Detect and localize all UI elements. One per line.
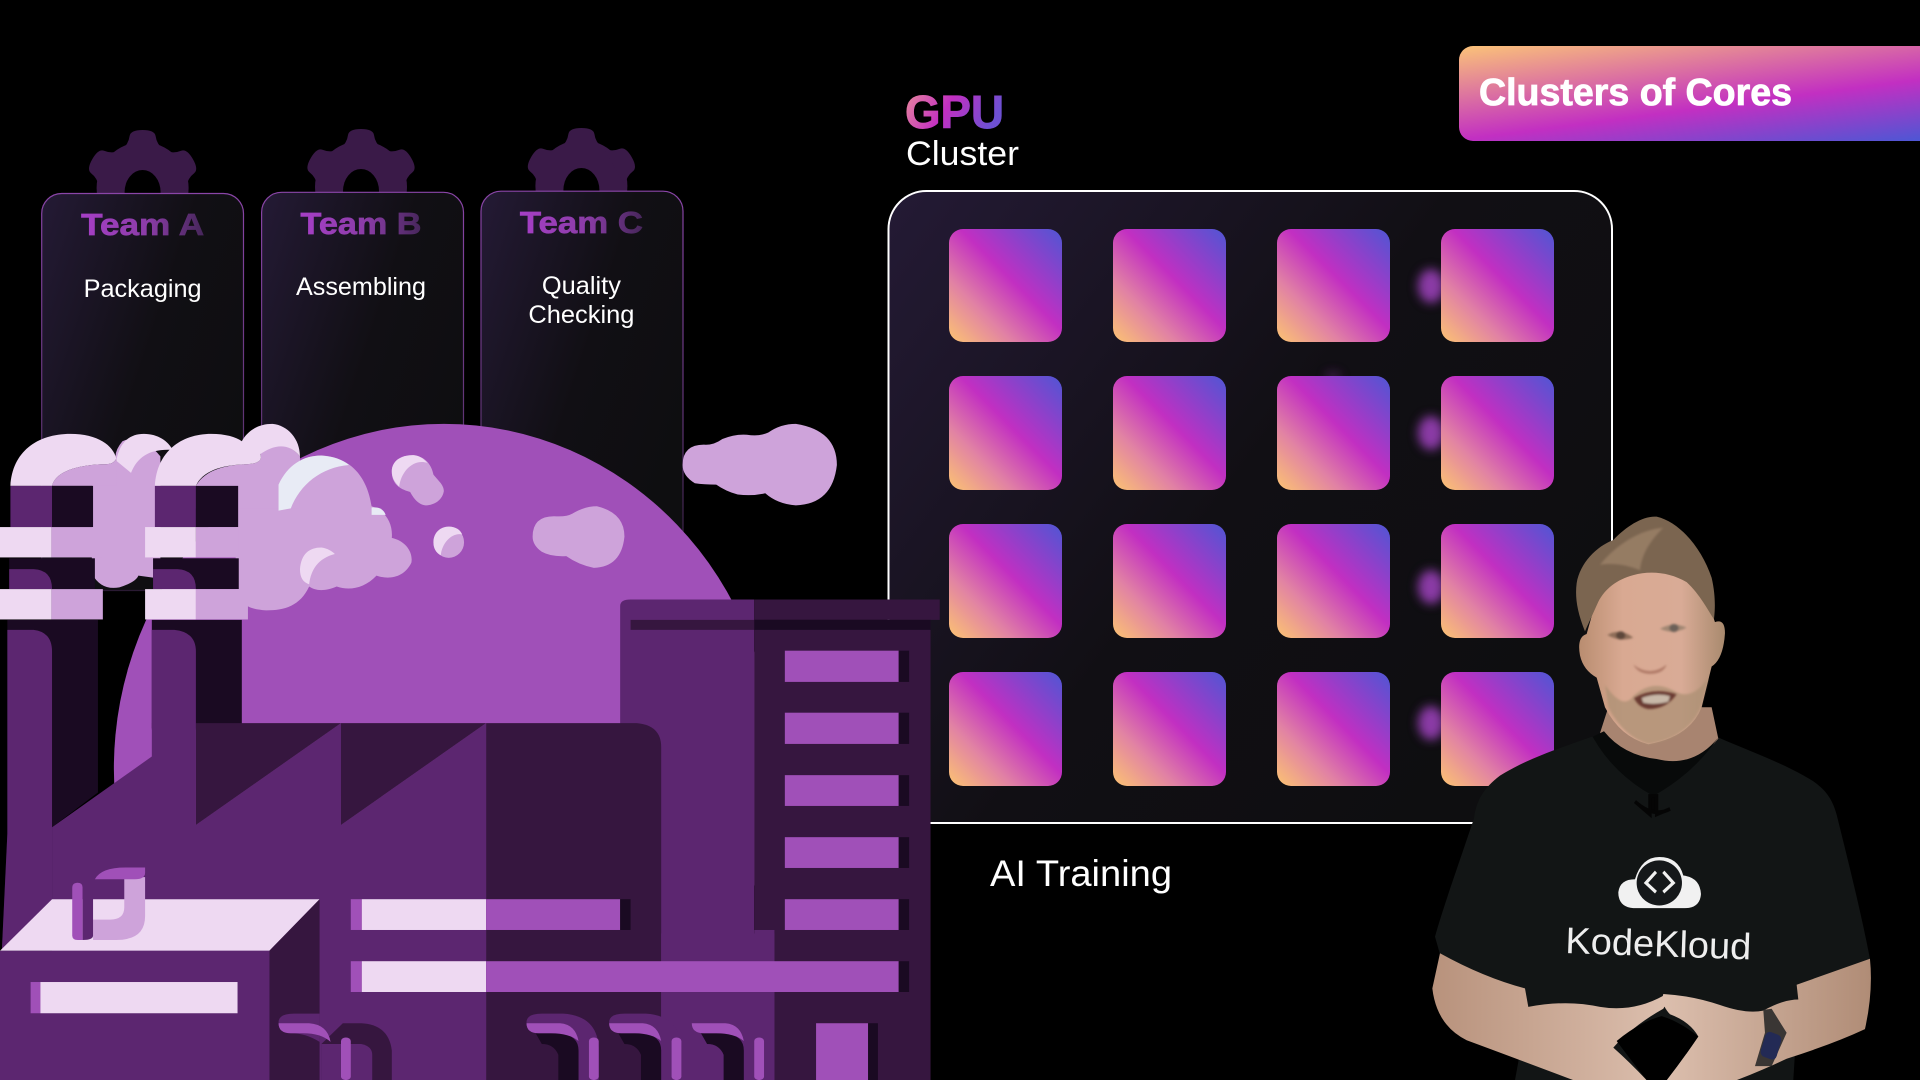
tall building xyxy=(620,600,940,1080)
head xyxy=(1579,563,1725,744)
cloud: on dome xyxy=(533,506,624,568)
presenter xyxy=(1432,517,1871,1080)
cloud: floating right xyxy=(683,424,837,505)
watch xyxy=(1755,1009,1787,1066)
neck xyxy=(1600,707,1718,763)
shirt wordmark: KodeKloud xyxy=(1565,920,1752,967)
team A task: Packaging xyxy=(84,275,202,303)
team B task: Assembling xyxy=(296,273,426,301)
smoke between chimneys xyxy=(92,434,173,588)
arm left xyxy=(1432,953,1667,1080)
building windows xyxy=(785,651,909,930)
team C task line two: Checking xyxy=(528,301,634,329)
panel: team A xyxy=(42,130,244,590)
roof pipe xyxy=(72,868,145,940)
chimney two xyxy=(152,620,242,730)
hair xyxy=(1576,517,1715,631)
smoke bubble small xyxy=(433,527,464,558)
icon: team C gear xyxy=(521,128,642,232)
nose shadow xyxy=(1633,665,1667,674)
team C title: Team C xyxy=(520,205,643,240)
sawtooth factory hall xyxy=(52,723,774,1080)
icon: team B gear xyxy=(300,129,422,233)
lapel mic xyxy=(1635,796,1670,814)
icon: team A gear xyxy=(82,130,203,234)
beard xyxy=(1605,678,1708,744)
dome xyxy=(114,424,774,1080)
smoke cloud large xyxy=(155,424,412,610)
collar shadow xyxy=(1593,731,1718,796)
badge: Clusters of Cores xyxy=(1459,46,1920,141)
heading: GPU: GPU xyxy=(905,86,1004,138)
eye right xyxy=(1660,624,1687,632)
bottom pipes xyxy=(279,1014,764,1080)
hall window strip one xyxy=(351,899,631,930)
front building xyxy=(0,899,320,1080)
heading: Cluster: Cluster xyxy=(906,135,1019,173)
hair highlight xyxy=(1600,528,1663,570)
GPU core grid xyxy=(949,229,1554,786)
arm right xyxy=(1662,959,1871,1080)
team C task: Quality xyxy=(542,272,621,300)
smoke cap one xyxy=(10,434,116,486)
team A title: Team A xyxy=(81,207,204,242)
label: AI Training: AI Training xyxy=(990,853,1172,894)
badge: Clusters of Cores: Clusters of Cores xyxy=(1479,72,1792,114)
smoke bubble large xyxy=(392,455,444,505)
chimney two bands xyxy=(145,486,248,619)
shirt logo xyxy=(1618,857,1701,908)
team B title: Team B xyxy=(300,206,422,241)
panel: team C xyxy=(481,128,683,588)
eye left xyxy=(1607,631,1633,640)
chimney one bands xyxy=(0,486,103,619)
hand gap xyxy=(1617,1016,1698,1080)
chimney one xyxy=(2,620,98,951)
t-shirt xyxy=(1435,737,1870,1080)
factory door xyxy=(816,1023,878,1080)
illustration: factory xyxy=(0,424,940,1080)
blurred glows behind cores xyxy=(1325,269,1444,740)
hall window strip two xyxy=(351,961,909,992)
panel: team B xyxy=(262,129,464,589)
mouth xyxy=(1634,691,1677,709)
panel: GPU cluster grid xyxy=(888,191,1612,823)
